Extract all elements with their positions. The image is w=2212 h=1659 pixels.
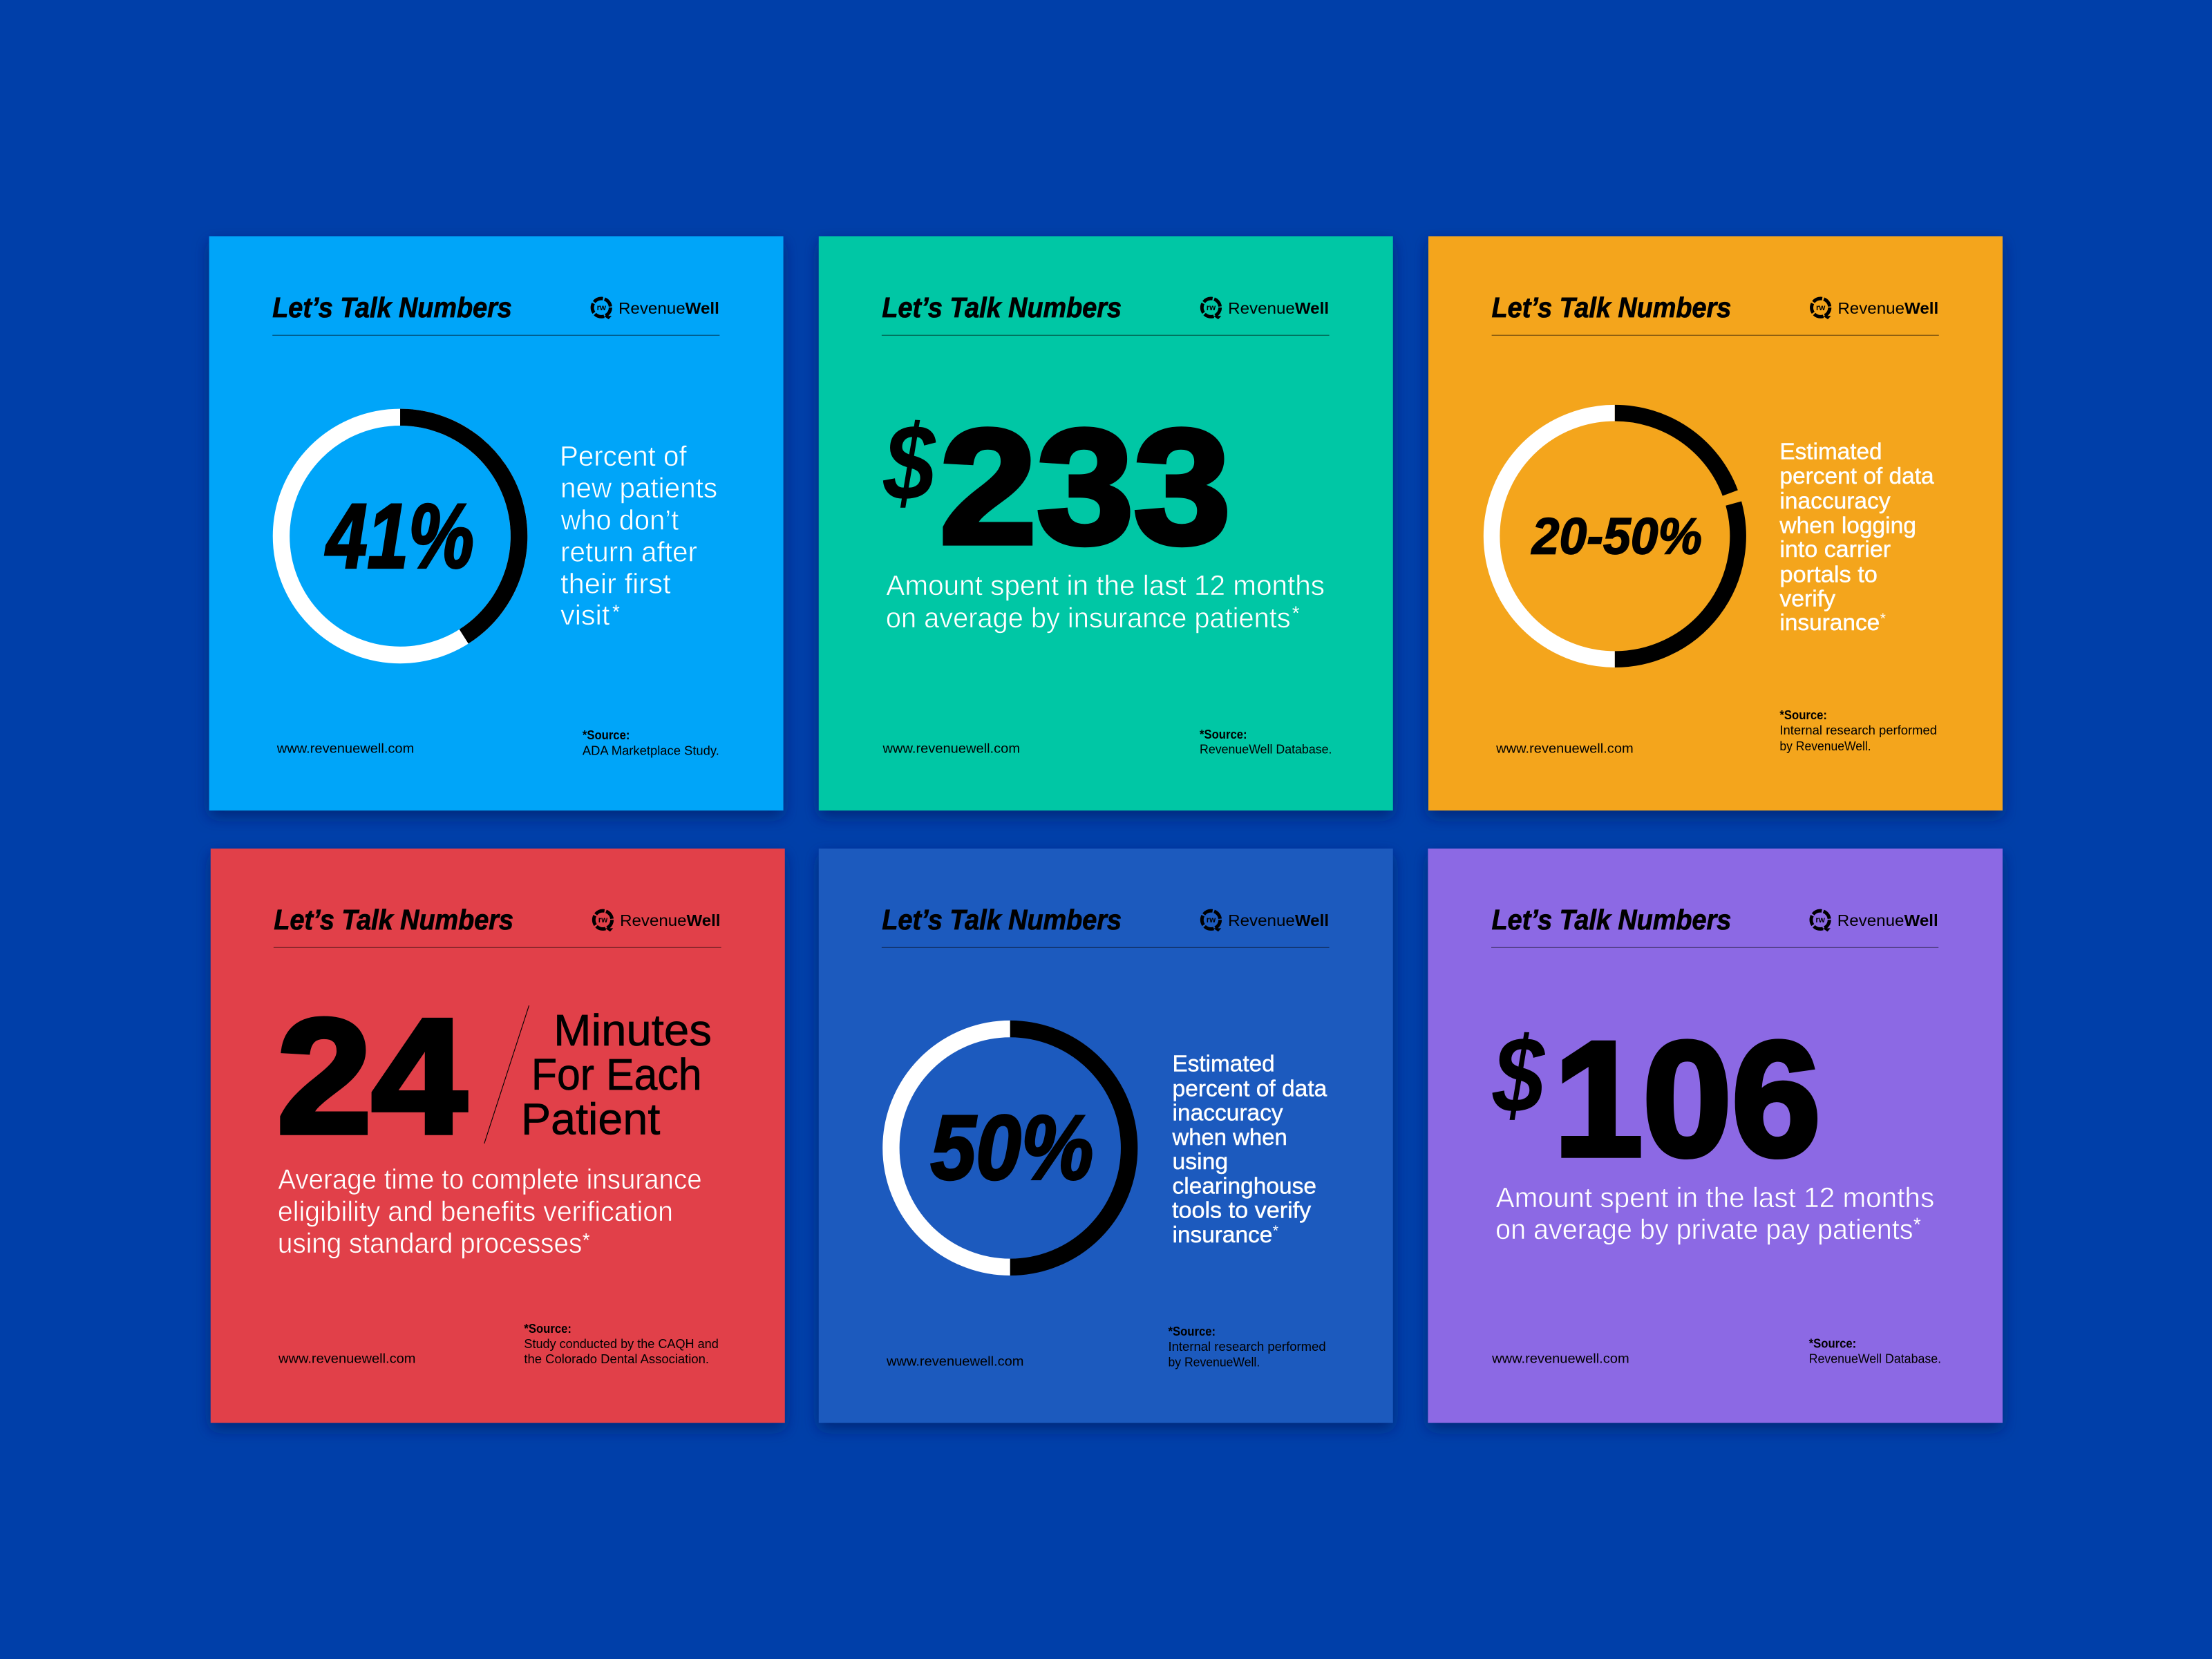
source note: [583, 728, 719, 757]
website: www.revenuewell.com: [882, 741, 1020, 757]
unit label: For Each: [531, 1050, 702, 1099]
source note: *Source:: [583, 728, 630, 742]
donut chart 20-50%: [1492, 413, 1738, 659]
panel: 41% new patients: [209, 236, 784, 810]
logo: RevenueWell: rw: [598, 916, 607, 925]
logo: RevenueWell: [1202, 298, 1329, 319]
logo: RevenueWell: rw: [1207, 916, 1216, 925]
source note: *Source:: [524, 1322, 571, 1336]
description: new patients: [560, 472, 717, 504]
description: [886, 569, 1325, 634]
description: their first: [560, 568, 671, 600]
description: percent of data: [1779, 463, 1934, 489]
description: Estimated: [1173, 1051, 1275, 1077]
donut chart 41%: [281, 417, 519, 655]
stat: $106: 106: [1554, 1008, 1821, 1190]
website: www.revenuewell.com: [278, 1351, 416, 1366]
description: when when: [1172, 1124, 1287, 1150]
logo: RevenueWell: rw: [1816, 304, 1825, 312]
donut chart 50%: [891, 1029, 1129, 1267]
logo: RevenueWell: [1811, 911, 1938, 931]
website: www.revenuewell.com: [1491, 1351, 1629, 1366]
description: insurance: [1779, 609, 1880, 635]
logo: RevenueWell: RevenueWell: [1837, 299, 1938, 317]
description: into carrier: [1779, 536, 1891, 562]
logo: RevenueWell: rw: [1815, 916, 1825, 925]
card background: [1428, 849, 2003, 1423]
description: Amount spent in the last 12 months: [1496, 1182, 1934, 1213]
panel: 20-50% data inaccuracy: [1428, 236, 2003, 810]
source note: RevenueWell Database.: [1809, 1352, 1941, 1365]
card background: [209, 236, 784, 810]
heading: Let’s Talk Numbers: [1492, 904, 1731, 936]
source note: Internal research performed: [1779, 723, 1937, 737]
logo: RevenueWell: [1202, 911, 1329, 931]
logo: RevenueWell: [594, 911, 721, 931]
stat: 20-50%: 20-50%: [1531, 507, 1702, 565]
heading: Let’s Talk Numbers: [272, 292, 512, 323]
description: on average by private pay patients: [1495, 1213, 1913, 1245]
source note: by RevenueWell.: [1779, 739, 1871, 753]
description: [1779, 439, 1934, 635]
source note: [1809, 1336, 1941, 1365]
source note: *Source:: [1779, 708, 1827, 722]
description: Estimated: [1779, 439, 1882, 464]
logo: RevenueWell: RevenueWell: [620, 911, 721, 929]
source note: ADA Marketplace Study.: [583, 743, 719, 757]
unit label: [521, 1006, 712, 1144]
source note: the Colorado Dental Association.: [524, 1352, 709, 1366]
website: www.revenuewell.com: [886, 1354, 1024, 1369]
description: *: [1273, 1223, 1278, 1239]
description: using: [1173, 1148, 1228, 1174]
card background: [211, 849, 785, 1423]
card background: [819, 849, 1393, 1423]
source note: [1779, 708, 1937, 753]
description: on average by insurance patients: [886, 602, 1291, 634]
description: [278, 1164, 702, 1259]
description: who don’t: [560, 504, 679, 536]
description: return after: [560, 536, 697, 568]
unit label: Patient: [521, 1095, 661, 1144]
description: insurance: [1173, 1222, 1272, 1247]
description: inaccuracy: [1779, 488, 1891, 513]
source note: [524, 1322, 719, 1366]
description: eligibility and benefits verification: [278, 1195, 673, 1227]
source note: Internal research performed: [1168, 1340, 1326, 1354]
logo: RevenueWell: [592, 298, 719, 319]
logo: RevenueWell: RevenueWell: [618, 299, 719, 317]
website: www.revenuewell.com: [1495, 741, 1634, 757]
logo: RevenueWell: rw: [1207, 304, 1216, 312]
panel: 24 minutes per patient: [211, 849, 785, 1423]
source note: *Source:: [1168, 1325, 1216, 1338]
heading: Let’s Talk Numbers: [882, 292, 1122, 323]
description: *: [1292, 603, 1300, 624]
logo: RevenueWell: rw: [597, 304, 606, 312]
logo: RevenueWell: RevenueWell: [1228, 299, 1329, 317]
stat: 24: 24: [277, 985, 466, 1167]
website: www.revenuewell.com: [276, 741, 414, 757]
description: inaccuracy: [1173, 1099, 1283, 1125]
panel: $106 private pay patients: [1428, 849, 2003, 1423]
description: *: [612, 600, 620, 622]
stat: $233: 233: [940, 396, 1231, 578]
heading: Let’s Talk Numbers: [274, 904, 513, 936]
description: *: [1913, 1214, 1921, 1235]
source note: *Source:: [1809, 1336, 1856, 1350]
card background: [819, 236, 1393, 810]
panel: 50% clearinghouse inaccuracy: [819, 849, 1393, 1423]
description: Average time to complete insurance: [278, 1164, 702, 1195]
source note: *Source:: [1200, 728, 1247, 741]
source note: by RevenueWell.: [1168, 1355, 1260, 1369]
source note: Study conducted by the CAQH and: [524, 1337, 719, 1351]
stat: $233: $: [883, 403, 936, 523]
logo: RevenueWell: RevenueWell: [1228, 911, 1329, 929]
description: [1172, 1051, 1327, 1247]
stat: 50%: 50%: [931, 1097, 1093, 1199]
source note: [1200, 728, 1332, 757]
stat: 41%: 41%: [325, 485, 474, 587]
logo: RevenueWell: RevenueWell: [1837, 911, 1938, 929]
heading: Let’s Talk Numbers: [882, 904, 1122, 936]
description: [1495, 1182, 1934, 1245]
logo: RevenueWell: [1812, 298, 1938, 319]
description: [560, 440, 717, 631]
description: percent of data: [1173, 1075, 1327, 1101]
description: *: [1880, 611, 1886, 627]
description: Amount spent in the last 12 months: [886, 569, 1325, 601]
slash divider: [484, 1005, 529, 1144]
card background: [1428, 236, 2003, 810]
panel: $233 insurance patients: [819, 236, 1393, 810]
unit label: Minutes: [554, 1006, 712, 1055]
description: Percent of: [560, 440, 687, 472]
description: verify: [1779, 585, 1836, 611]
description: tools to verify: [1172, 1197, 1312, 1222]
description: clearinghouse: [1173, 1173, 1316, 1198]
description: using standard processes: [278, 1227, 582, 1259]
source note: RevenueWell Database.: [1200, 743, 1332, 757]
description: *: [583, 1229, 590, 1251]
description: visit: [560, 599, 609, 631]
description: portals to: [1779, 561, 1878, 587]
stat: $106: $: [1492, 1015, 1545, 1135]
heading: Let’s Talk Numbers: [1492, 292, 1731, 323]
description: when logging: [1779, 513, 1916, 538]
source note: [1168, 1325, 1326, 1369]
